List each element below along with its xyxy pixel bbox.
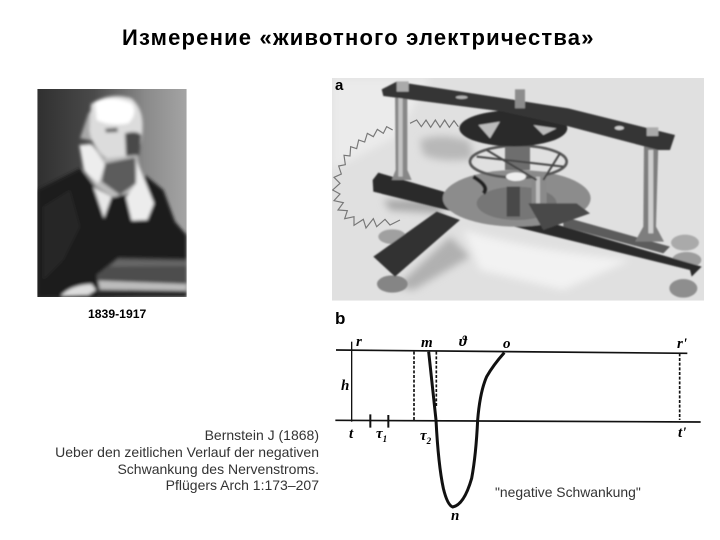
front arm (373, 212, 460, 277)
citation text: Bernstein J (1868) (205, 427, 319, 443)
book (97, 258, 187, 297)
graph letters: r' (677, 336, 687, 352)
central mechanism (470, 146, 567, 178)
citation text: Pflügers Arch 1:173–207 (166, 477, 319, 493)
disc (443, 170, 591, 227)
graph letters: h (341, 378, 349, 394)
citation text: Ueber den zeitlichen Verlauf der negativen (55, 444, 319, 460)
shirt (93, 187, 112, 218)
portrait caption: 1839-1917 (88, 307, 146, 321)
head (89, 96, 143, 160)
coat (37, 168, 187, 297)
lower hand (61, 284, 96, 296)
top beam (382, 82, 675, 150)
wheel (459, 110, 567, 146)
panel label b: b (335, 309, 345, 328)
curve (429, 352, 504, 507)
beard (79, 143, 140, 197)
face shadow (125, 132, 141, 156)
citation text (55, 427, 319, 493)
ticks (370, 414, 388, 428)
graph b (335, 342, 701, 507)
dashed lines (414, 352, 680, 421)
spring wire (333, 120, 458, 228)
graph letters: t (349, 426, 353, 442)
graph letters: t' (678, 425, 686, 441)
title: Измерение «животного электричества» (122, 25, 595, 50)
hand (126, 162, 154, 221)
graph letters: m (421, 335, 433, 351)
base bar (373, 173, 702, 277)
citation text: Schwankung des Nervenstroms. (117, 461, 319, 477)
graph letters: r (356, 334, 362, 350)
curve annotation: "negative Schwankung" (495, 484, 641, 500)
baselines (336, 350, 687, 353)
graph letters: τ1 (376, 426, 387, 444)
graph letters: o (503, 336, 510, 352)
graph letters: τ2 (420, 428, 431, 446)
graph letters: n (451, 508, 459, 524)
apparatus photo (332, 78, 704, 301)
graph letters: ϑ (459, 334, 467, 350)
columns (392, 90, 412, 180)
hair (80, 103, 98, 142)
feet (377, 275, 408, 293)
panel label a: a (335, 77, 343, 94)
portrait photo (37, 89, 187, 297)
